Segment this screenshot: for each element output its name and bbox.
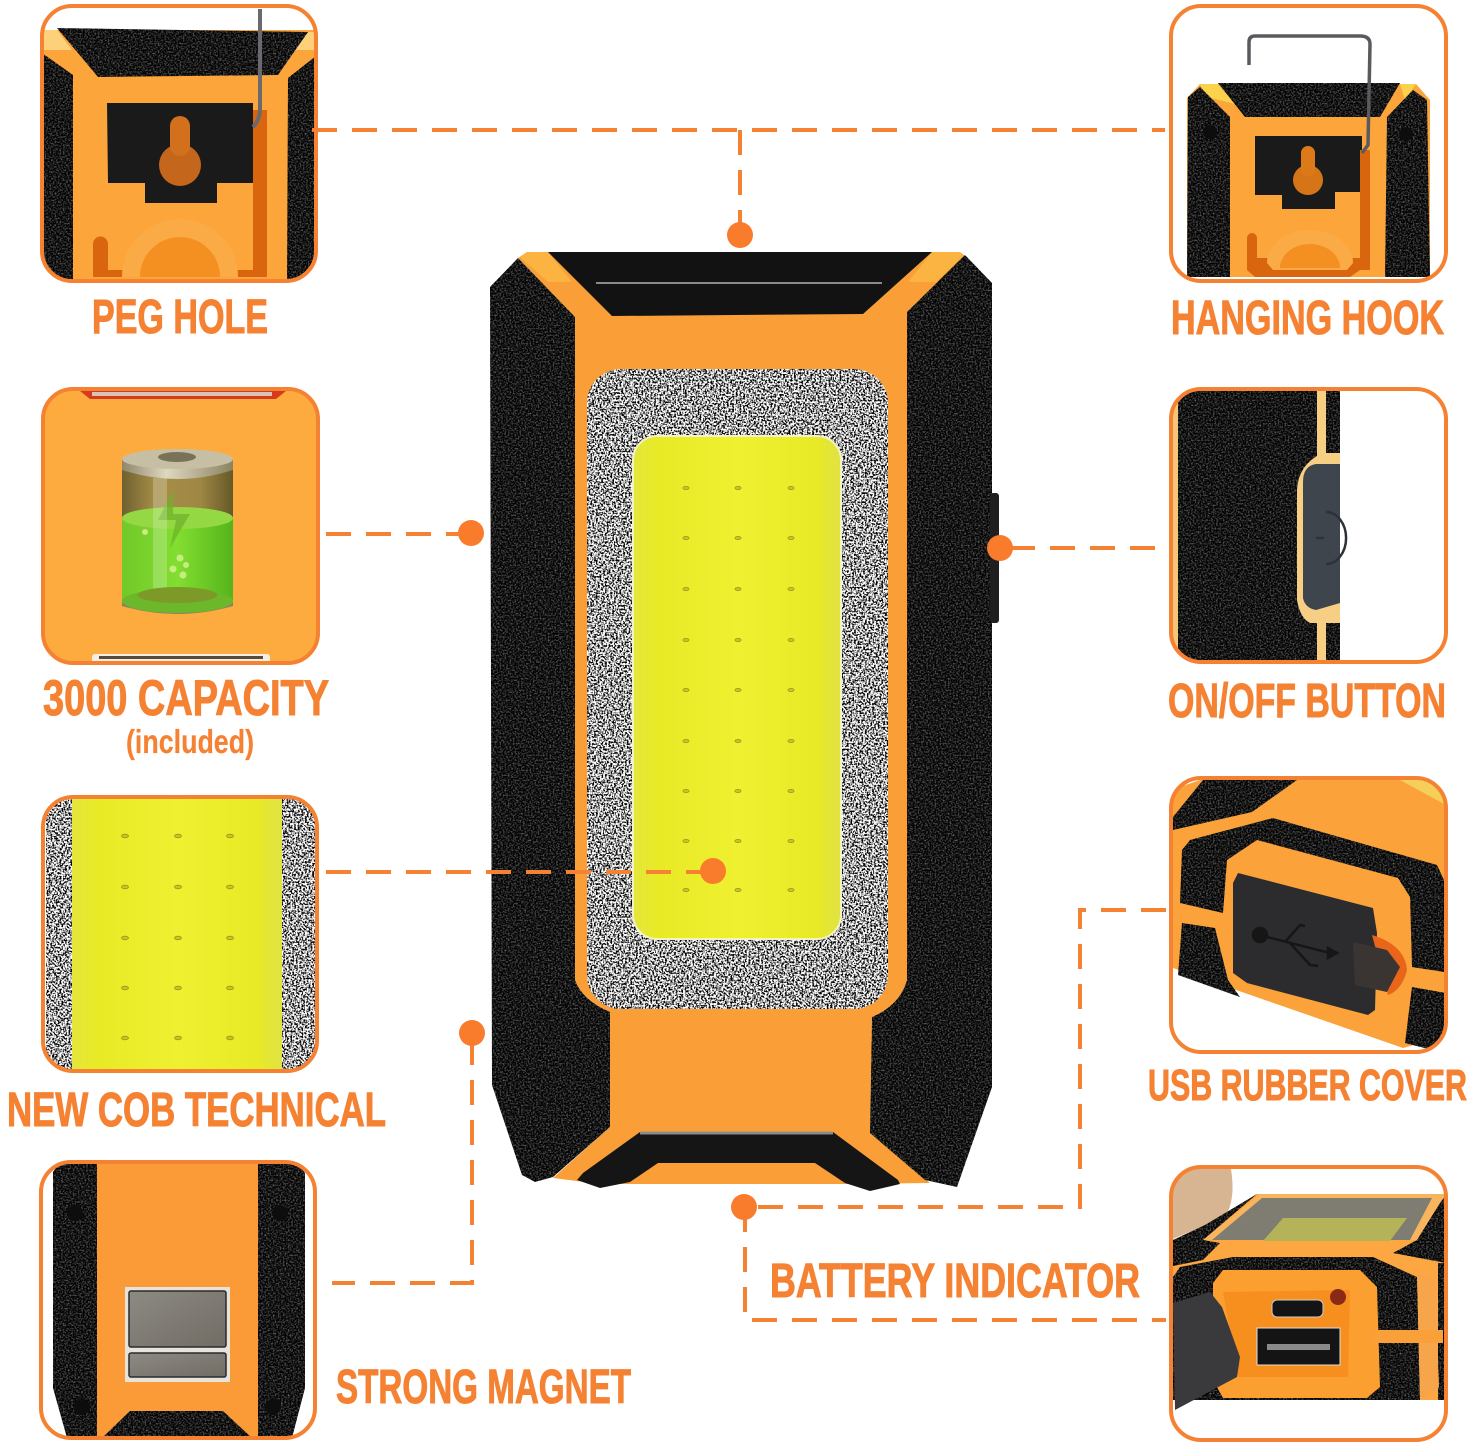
LED dots bbox=[683, 486, 794, 892]
panel: battery indicator photo bbox=[1171, 1167, 1446, 1440]
heading: battery indicator: BATTERY INDICATOR bbox=[770, 1255, 1140, 1308]
heading: new COB technical: NEW COB TECHNICAL bbox=[7, 1084, 386, 1137]
panel: USB rubber cover photo bbox=[1171, 778, 1446, 1052]
panel: COB technical photo bbox=[43, 797, 317, 1071]
heading: 3000 capacity: 3000 CAPACITY bbox=[43, 670, 329, 726]
icon: USB symbol bbox=[1253, 925, 1337, 966]
side button bbox=[990, 493, 999, 623]
panel: peg hole photo bbox=[42, 6, 316, 281]
panel: battery capacity photo bbox=[43, 389, 318, 663]
orange frame bbox=[518, 252, 965, 1184]
main product: work light bbox=[490, 252, 999, 1191]
icon: battery bbox=[122, 449, 233, 614]
panel: strong magnet photo bbox=[41, 1162, 315, 1438]
connector end dots bbox=[458, 222, 1013, 1220]
connector lines bbox=[312, 130, 1166, 1320]
reflector bbox=[587, 369, 888, 1009]
text: included: (included) bbox=[126, 723, 254, 760]
bottom dark band bbox=[577, 1132, 900, 1191]
panel: hanging hook photo bbox=[1171, 6, 1446, 281]
orange top corners bbox=[520, 252, 963, 282]
black side grips bbox=[490, 255, 992, 1187]
heading: peg hole: PEG HOLE bbox=[92, 291, 268, 344]
panel: on/off button photo bbox=[1171, 389, 1446, 662]
COB panel bbox=[633, 436, 841, 939]
heading: strong magnet: STRONG MAGNET bbox=[336, 1361, 631, 1414]
top dark band bbox=[548, 252, 932, 316]
